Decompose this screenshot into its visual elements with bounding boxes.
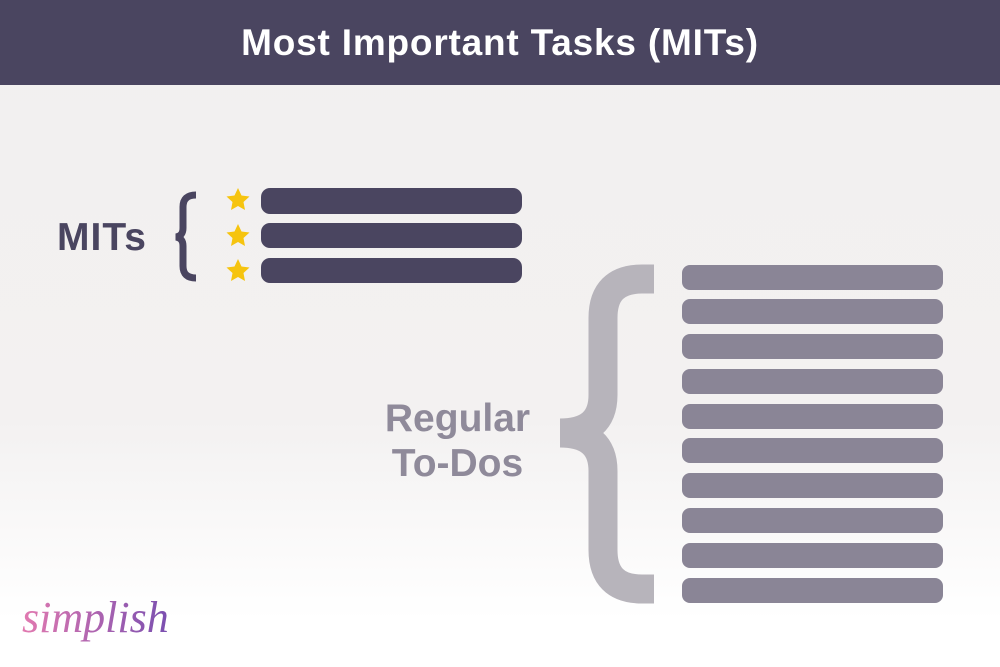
logo: simplish: [22, 593, 169, 642]
title: Most Important Tasks (MITs): [241, 22, 759, 63]
large brace: [560, 279, 654, 589]
label: Regular To-Dos: To-Dos: [392, 442, 523, 485]
label: Regular To-Dos: [385, 397, 530, 485]
label: Regular To-Dos: Regular: [385, 397, 530, 440]
label: MITs: MITs: [57, 216, 147, 259]
stars: [226, 188, 250, 281]
regular to-do bars: [682, 265, 943, 603]
MIT bars: [261, 188, 522, 283]
small brace: [176, 195, 196, 278]
title: [0, 0, 1000, 85]
